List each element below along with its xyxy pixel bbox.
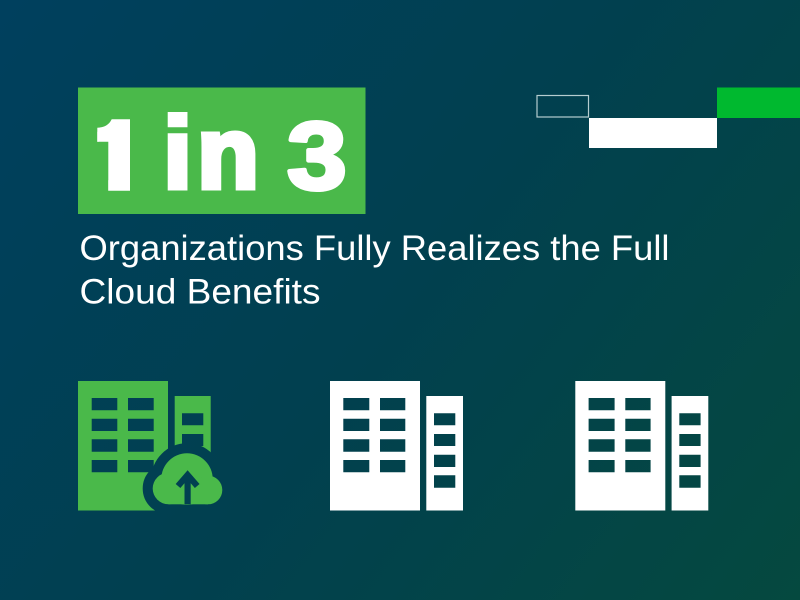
icon: cloud upload — [153, 453, 222, 505]
stat badge: 1 in 3: 1 — [89, 101, 145, 213]
headline: Organizations Fully Realizes the Full — [80, 229, 670, 268]
stat badge: 1 in 3: 3 — [287, 102, 347, 210]
decorative block: green rectangle — [717, 88, 800, 118]
headline — [80, 229, 670, 312]
stat badge: 1 in 3 — [78, 88, 366, 214]
decorative block: white rectangle — [589, 118, 717, 148]
icon: green buildings with cloud upload — [78, 381, 222, 510]
headline: Cloud Benefits — [80, 272, 320, 312]
stat badge: 1 in 3: in — [164, 98, 259, 210]
icon: white buildings (second) — [330, 381, 463, 510]
decorative block: outlined rectangle — [537, 96, 588, 117]
icon: white buildings (third) — [575, 381, 708, 510]
